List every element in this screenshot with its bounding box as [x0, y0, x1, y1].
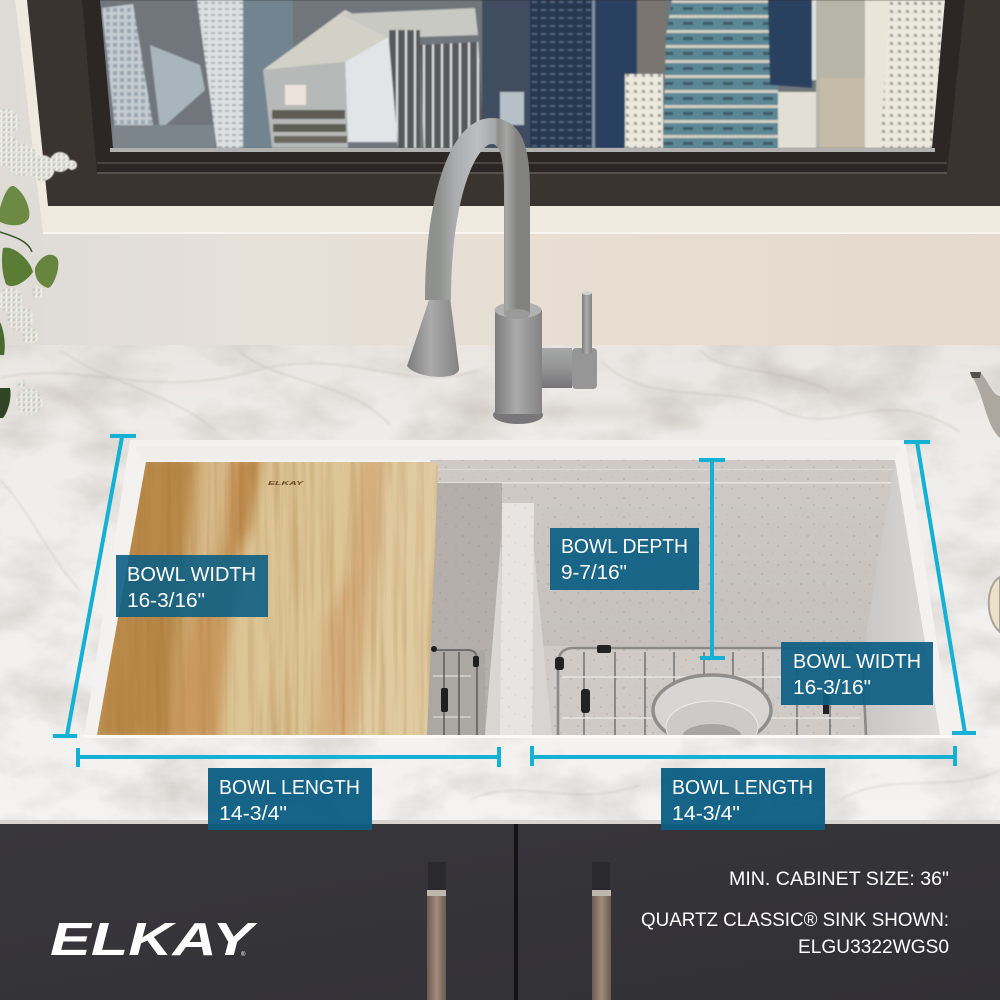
white tower	[196, 0, 244, 148]
dimension line: bowl length right	[532, 746, 955, 766]
side dish	[989, 577, 1000, 632]
left bowl back wall	[425, 483, 502, 735]
window frame	[27, 0, 1000, 206]
faucet spray head	[407, 297, 459, 377]
green leaves	[0, 186, 58, 418]
sink rim	[84, 440, 952, 738]
white flowers	[0, 109, 77, 415]
label: bowl width right	[781, 642, 933, 705]
cutting board	[90, 455, 445, 740]
label: bowl width left: BOWL WIDTH	[127, 564, 256, 586]
brand logo: ELKAY	[50, 913, 259, 965]
product note	[641, 910, 949, 958]
kettle	[970, 372, 1000, 438]
divider	[485, 503, 552, 735]
cabinets	[0, 820, 1000, 1000]
label: bowl length left: 14-3/4"	[219, 803, 287, 825]
wall	[0, 0, 1000, 350]
brand logo: ®	[241, 951, 246, 958]
right handle	[592, 862, 611, 1000]
label: bowl width right: BOWL WIDTH	[793, 651, 921, 673]
sink front edge	[84, 735, 952, 738]
right side wall	[865, 460, 940, 735]
drain strainer	[651, 673, 773, 735]
right rack	[558, 648, 866, 735]
dimension line: bowl width right	[904, 442, 976, 733]
label: bowl length right	[661, 768, 825, 830]
tower far left	[102, 4, 153, 128]
dimension line: bowl length left	[78, 747, 499, 767]
label: bowl length right: 14-3/4"	[672, 803, 740, 825]
product note: ELGU3322WGS0	[798, 937, 949, 958]
label: bowl length right: BOWL LENGTH	[672, 777, 813, 799]
F1 building	[263, 8, 478, 148]
label: bowl length left	[208, 768, 372, 830]
label: bowl width right: 16-3/16"	[793, 677, 871, 699]
countertop	[0, 345, 1000, 827]
dimension line: bowl width left	[53, 436, 136, 736]
label: bowl depth: BOWL DEPTH	[561, 536, 688, 558]
cabinet size note: MIN. CABINET SIZE: 36"	[729, 869, 949, 890]
label: bowl length left: BOWL LENGTH	[219, 777, 360, 799]
label: bowl depth: 9-7/16"	[561, 562, 627, 584]
label: bowl depth	[550, 528, 699, 590]
faucet	[407, 131, 597, 424]
back wall	[430, 458, 940, 650]
faucet side housing	[530, 348, 597, 389]
rack clips	[555, 645, 829, 714]
label: bowl width left	[116, 555, 268, 617]
floor	[533, 646, 940, 738]
left handle	[427, 862, 446, 1000]
dimension line: bowl depth	[699, 460, 725, 658]
label: bowl width left: 16-3/16"	[127, 590, 205, 612]
cutting board: ELKAY	[268, 481, 304, 487]
sink basin	[425, 458, 940, 753]
window: city view	[95, 0, 950, 150]
product note: QUARTZ CLASSIC® SINK SHOWN:	[641, 910, 949, 931]
faucet neck	[438, 131, 530, 319]
faucet lever	[582, 291, 592, 354]
plant	[0, 109, 77, 418]
faucet body	[493, 302, 543, 424]
left rack	[433, 650, 477, 735]
